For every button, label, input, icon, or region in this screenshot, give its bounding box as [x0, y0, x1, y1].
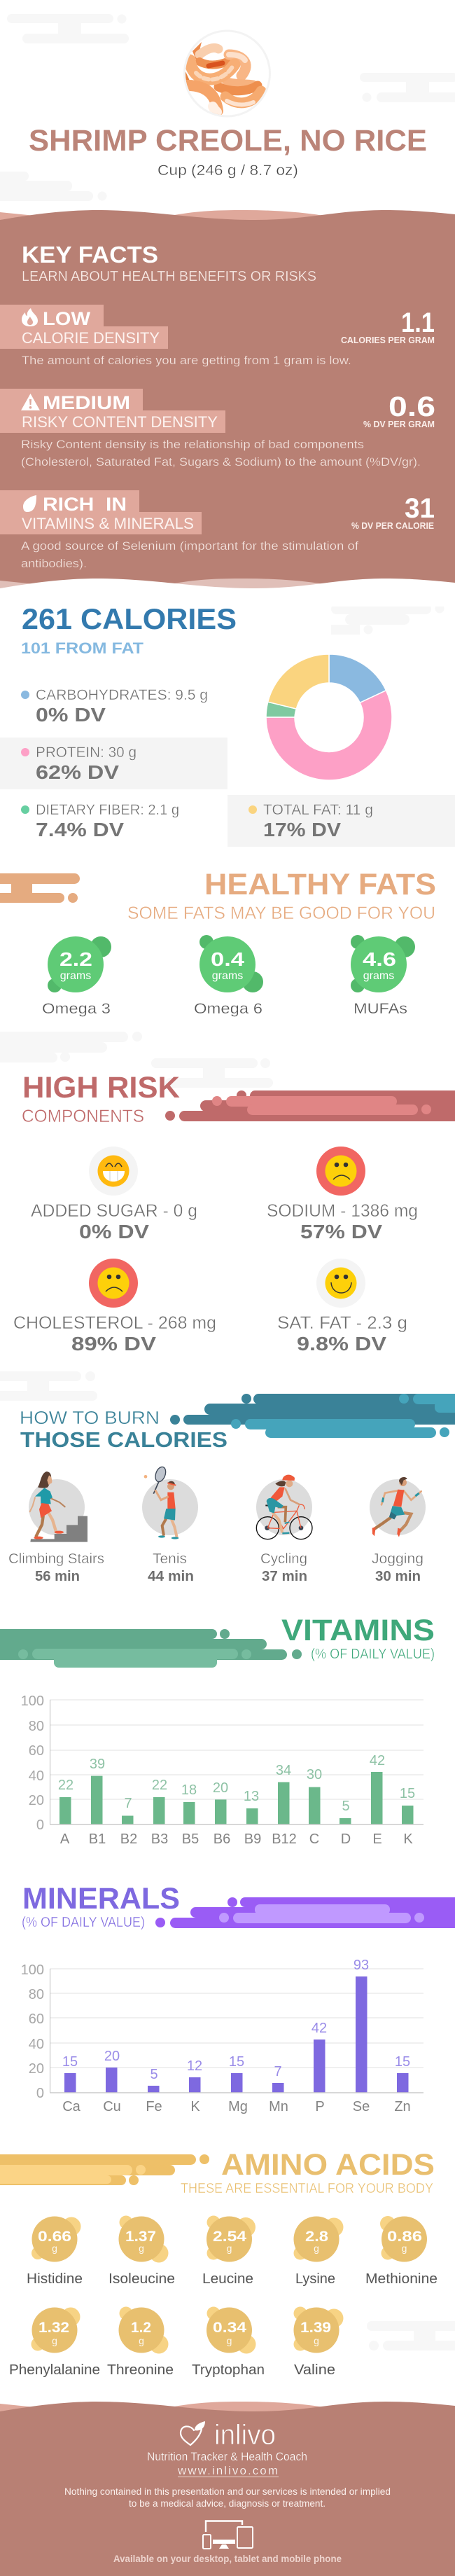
bar chart: vitamins: 22	[58, 1778, 74, 1793]
bar chart: minerals: Mn	[269, 2099, 288, 2114]
amino: tryptophan: Tryptophan	[192, 2362, 265, 2378]
risk: added sugar: ADDED SUGAR - 0 g	[31, 1201, 197, 1221]
bar chart: vitamins: 20	[29, 1793, 44, 1808]
amino: lysine: g	[314, 2243, 319, 2254]
donut chart	[266, 654, 392, 780]
website link: www.inlivo.com	[177, 2464, 278, 2477]
bar chart: minerals	[21, 1958, 424, 2114]
panel: healthy fats	[0, 868, 436, 1017]
panel: minerals	[21, 1882, 455, 2114]
amino: leucine: Leucine	[202, 2271, 253, 2287]
bar chart: vitamins: 30	[307, 1767, 322, 1782]
panel: how to burn	[8, 1394, 455, 1584]
legend: total fat	[227, 795, 455, 847]
amino: isoleucine: g	[139, 2243, 144, 2254]
bar chart: minerals: 100	[21, 1962, 44, 1978]
bar chart: vitamins: 0	[36, 1817, 44, 1833]
heading: key facts: KEY FACTS	[22, 242, 158, 268]
icon: warning triangle	[21, 394, 40, 410]
panel: high risk	[13, 1071, 455, 1355]
bar chart: minerals: Cu	[103, 2099, 121, 2114]
legend: dietary fiber: DIETARY FIBER: 2.1 g	[36, 802, 179, 818]
fat: omega 6: grams	[212, 970, 243, 982]
fat: mufas	[351, 935, 415, 1017]
bar chart: minerals: 40	[29, 2037, 44, 2052]
amino: isoleucine	[108, 2216, 175, 2287]
amino: tryptophan	[192, 2307, 265, 2378]
bar chart: vitamins: E	[372, 1831, 382, 1847]
heading: minerals: MINERALS	[22, 1882, 180, 1916]
decorative blob: teal	[170, 1394, 455, 1438]
bar chart: vitamins: D	[341, 1831, 351, 1847]
fact: rich in vitamins and minerals: antibodies).	[21, 557, 87, 570]
activity: climbing stairs	[8, 1471, 104, 1584]
bar chart: vitamins: A	[60, 1831, 70, 1847]
fact: rich in vitamins and minerals: A good source of Selenium (important for the stimulation of	[21, 539, 358, 553]
amino: tryptophan: 0.34	[213, 2320, 246, 2336]
activity: cycling	[256, 1475, 312, 1584]
subheading: LEARN ABOUT HEALTH BENEFITS OR RISKS	[22, 269, 316, 284]
panel: footer	[0, 2402, 455, 2576]
disclaimer: Nothing contained in this presentation and our services is intended or implied	[64, 2486, 391, 2497]
legend: carbohydrates: CARBOHYDRATES: 9.5 g	[36, 687, 208, 703]
activity: jogging	[370, 1477, 426, 1584]
heading: high risk: HIGH RISK	[22, 1071, 180, 1105]
decorative blob: yellow	[0, 2154, 209, 2185]
bar chart: minerals: 20	[104, 2049, 120, 2064]
icon: flame	[22, 308, 38, 326]
risk: sodium: 57% DV	[300, 1221, 382, 1242]
fat: omega 3: Omega 3	[42, 1001, 111, 1017]
bar chart: vitamins: 18	[181, 1782, 197, 1798]
bar chart: minerals: 20	[29, 2061, 44, 2077]
activity: jogging: 30 min	[375, 1569, 421, 1584]
amino: methionine: 0.86	[387, 2229, 422, 2245]
heading: vitamins: VITAMINS	[281, 1614, 435, 1647]
activity: tennis: Tenis	[153, 1551, 187, 1567]
serving size: Cup (246 g / 8.7 oz)	[158, 162, 298, 179]
amino: phenylalanine	[9, 2307, 100, 2378]
risk: added sugar: 0% DV	[79, 1221, 149, 1242]
subheading: (% OF DAILY VALUE)	[311, 1647, 435, 1662]
activity: climbing stairs: 56 min	[35, 1569, 80, 1584]
risk: sodium	[267, 1147, 418, 1242]
bar chart: vitamins: B6	[214, 1831, 230, 1847]
bar chart: vitamins: 22	[152, 1778, 167, 1793]
bar chart: vitamins: 5	[342, 1799, 350, 1814]
amino: methionine	[365, 2216, 438, 2287]
legend: carbohydrates	[21, 687, 208, 726]
fat: mufas: grams	[363, 970, 394, 982]
amino: threonine: 1.2	[131, 2320, 151, 2336]
amino: isoleucine: Isoleucine	[108, 2271, 175, 2287]
activity: tennis	[142, 1465, 198, 1584]
risk: saturated fat: 9.8% DV	[297, 1333, 386, 1355]
fact: medium risky content density: MEDIUM	[43, 392, 130, 413]
activity: climbing stairs: Climbing Stairs	[8, 1551, 104, 1567]
decorative blob: green	[0, 1629, 302, 1668]
fact: low calorie density: 1.1	[401, 307, 435, 338]
heading: those calories: THOSE CALORIES	[20, 1427, 227, 1452]
bar chart: vitamins	[21, 1694, 424, 1847]
amino: leucine: g	[227, 2243, 232, 2254]
subheading: THESE ARE ESSENTIAL FOR YOUR BODY	[181, 2181, 433, 2196]
bar chart: vitamins: 13	[244, 1789, 259, 1804]
fat: omega 6: 0.4	[211, 948, 245, 970]
heading: how to burn: HOW TO BURN	[20, 1407, 160, 1428]
legend: total fat: TOTAL FAT: 11 g	[263, 802, 373, 818]
amino: lysine	[294, 2216, 343, 2287]
bar chart: vitamins: 60	[29, 1743, 44, 1759]
icon: leaf	[23, 495, 36, 512]
bar chart: minerals: Fe	[146, 2099, 162, 2114]
activity: jogging: Jogging	[372, 1551, 424, 1567]
heading: calories: 261 CALORIES	[22, 602, 237, 635]
bar chart: vitamins: 15	[400, 1786, 415, 1801]
fact: low calorie density: The amount of calories you are getting from 1 gram is low.	[22, 354, 351, 367]
fat: omega 6: Omega 6	[194, 1001, 262, 1017]
bar chart: minerals: 80	[29, 1987, 44, 2002]
bar chart: minerals: Mg	[228, 2099, 248, 2114]
fact: medium risky content density	[0, 389, 435, 469]
bar chart: vitamins: K	[403, 1831, 413, 1847]
amino: phenylalanine: g	[52, 2335, 57, 2346]
amino: lysine: 2.8	[305, 2229, 328, 2245]
bar chart: minerals: Ca	[62, 2099, 81, 2114]
decorative blob: red	[165, 1090, 455, 1121]
disclaimer: to be a medical advice, diagnosis or treatment.	[129, 2498, 326, 2509]
activity: tennis: 44 min	[148, 1569, 194, 1584]
tagline: Nutrition Tracker & Health Coach	[147, 2450, 307, 2463]
bar chart: minerals: 0	[36, 2086, 44, 2101]
bar chart: minerals: 60	[29, 2011, 44, 2027]
fat: mufas: MUFAs	[354, 1001, 407, 1017]
fat: omega 3: 2.2	[59, 948, 92, 970]
activity: cycling: Cycling	[260, 1551, 307, 1567]
amino: threonine	[107, 2307, 174, 2378]
bar chart: vitamins: B3	[151, 1831, 168, 1847]
fact: medium risky content density: 0.6	[388, 392, 435, 422]
legend: dietary fiber	[21, 802, 179, 840]
panel: vitamins	[0, 1614, 435, 1847]
heading: amino acids: AMINO ACIDS	[221, 2148, 435, 2182]
bar chart: vitamins: B9	[244, 1831, 261, 1847]
heading: healthy fats: HEALTHY FATS	[204, 868, 436, 901]
icon: shrimp photo	[183, 31, 270, 116]
fact: low calorie density: LOW	[43, 308, 91, 329]
subheading: from fat: 101 FROM FAT	[21, 639, 144, 657]
decorative blob: orange	[0, 873, 80, 903]
amino: phenylalanine: 1.32	[38, 2320, 69, 2336]
amino: valine: 1.39	[300, 2320, 331, 2336]
availability note: Available on your desktop, tablet and mobile phone	[113, 2553, 342, 2564]
amino: leucine	[202, 2216, 255, 2287]
amino: isoleucine: 1.37	[125, 2229, 156, 2245]
fat: omega 3	[42, 936, 111, 1017]
bar chart: vitamins: B2	[120, 1831, 137, 1847]
bar chart: vitamins: 20	[213, 1780, 228, 1796]
amino: methionine: g	[402, 2243, 407, 2254]
logo: inlivo	[181, 2418, 276, 2451]
amino: threonine: Threonine	[107, 2362, 174, 2378]
amino: methionine: Methionine	[365, 2271, 438, 2287]
amino: valine: Valine	[294, 2362, 335, 2378]
amino: histidine	[27, 2216, 83, 2287]
disclaimer	[64, 2486, 391, 2509]
amino: valine	[294, 2307, 343, 2378]
subheading: (% OF DAILY VALUE)	[22, 1915, 145, 1930]
risk: saturated fat: SAT. FAT - 2.3 g	[277, 1313, 407, 1333]
bar chart: minerals: 12	[187, 2058, 202, 2074]
bar chart: vitamins: 39	[90, 1757, 105, 1772]
decorative blob: purple	[155, 1897, 455, 1928]
fact: medium risky content density: RISKY CONTENT DENSITY	[22, 413, 218, 431]
fact: medium risky content density: % DV PER GRAM	[363, 420, 435, 429]
panel: key facts	[0, 210, 455, 607]
bar chart: minerals: 15	[62, 2054, 78, 2070]
fact: rich in vitamins and minerals: % DV PER CALORIE	[351, 521, 434, 531]
amino: histidine: 0.66	[38, 2229, 71, 2245]
legend: total fat: 17% DV	[263, 819, 341, 840]
wave bottom	[0, 579, 455, 607]
bar chart: vitamins: C	[309, 1831, 319, 1847]
amino: threonine: g	[139, 2335, 144, 2346]
bar chart: vitamins: 7	[124, 1796, 132, 1811]
bar chart: vitamins: B12	[272, 1831, 297, 1847]
amino: leucine: 2.54	[213, 2229, 246, 2245]
subheading: SOME FATS MAY BE GOOD FOR YOU	[127, 903, 435, 923]
bar chart: vitamins: 42	[370, 1753, 385, 1768]
risk: cholesterol	[13, 1259, 216, 1355]
bar chart: minerals: 93	[354, 1958, 369, 1973]
title: SHRIMP CREOLE, NO RICE	[29, 124, 427, 158]
risk: added sugar	[31, 1147, 197, 1242]
fact: low calorie density	[0, 305, 435, 367]
bar chart: minerals: 15	[229, 2054, 244, 2070]
amino: phenylalanine: Phenylalanine	[9, 2362, 100, 2378]
risk: cholesterol: 89% DV	[71, 1333, 156, 1355]
fat: mufas: 4.6	[363, 948, 396, 970]
bar chart: minerals: 15	[395, 2054, 410, 2070]
risk: sodium: SODIUM - 1386 mg	[267, 1201, 418, 1221]
fact: rich in vitamins and minerals: VITAMINS & MINERALS	[22, 515, 194, 532]
bar chart: vitamins: B5	[182, 1831, 199, 1847]
fact: medium risky content density: Risky Content density is the relationship of bad components	[21, 438, 364, 451]
amino: histidine: g	[52, 2243, 57, 2254]
bar chart: vitamins: 40	[29, 1768, 44, 1784]
fact: low calorie density: CALORIES PER GRAM	[341, 335, 435, 345]
fat: omega 6	[194, 935, 263, 1017]
amino: lysine: Lysine	[295, 2271, 335, 2287]
bar chart: vitamins: 100	[21, 1694, 44, 1709]
fact: rich in vitamins and minerals: 31	[405, 493, 435, 524]
fact: rich in vitamins and minerals	[0, 490, 435, 570]
bar chart: minerals: K	[190, 2099, 200, 2114]
panel: calories	[0, 602, 455, 847]
bar chart: vitamins: B1	[89, 1831, 106, 1847]
bar chart: minerals: Se	[353, 2099, 370, 2114]
risk: cholesterol: CHOLESTEROL - 268 mg	[13, 1313, 216, 1333]
legend: protein: PROTEIN: 30 g	[36, 745, 136, 761]
fact: rich in vitamins and minerals: RICH IN	[43, 494, 127, 515]
legend: protein	[0, 738, 227, 789]
fact: low calorie density: CALORIE DENSITY	[22, 329, 160, 347]
icon: devices	[203, 2521, 253, 2549]
wave top	[0, 210, 455, 238]
logo: inlivo: inlivo	[214, 2418, 276, 2451]
bar chart: minerals: 7	[274, 2064, 282, 2079]
amino: tryptophan: g	[227, 2335, 232, 2346]
fat: omega 3: grams	[60, 970, 91, 982]
amino: histidine: Histidine	[27, 2271, 83, 2287]
bar chart: minerals: 42	[312, 2021, 327, 2036]
bar chart: vitamins: 80	[29, 1719, 44, 1734]
legend: carbohydrates: 0% DV	[36, 704, 106, 726]
bar chart: minerals: P	[315, 2099, 325, 2114]
bar chart: vitamins: 34	[276, 1763, 291, 1778]
subheading: components: COMPONENTS	[22, 1107, 144, 1126]
fact: medium risky content density: (Cholesterol, Saturated Fat, Sugars & Sodium) to the amount (%DV/gr).	[21, 455, 421, 469]
bar chart: minerals: 5	[150, 2067, 158, 2082]
activity: cycling: 37 min	[262, 1569, 307, 1584]
risk: saturated fat	[277, 1259, 407, 1355]
panel: amino acids	[0, 2148, 438, 2378]
bar chart: minerals: Zn	[394, 2099, 411, 2114]
legend: protein: 62% DV	[36, 761, 119, 783]
amino: valine: g	[314, 2335, 319, 2346]
legend: dietary fiber: 7.4% DV	[36, 819, 124, 840]
